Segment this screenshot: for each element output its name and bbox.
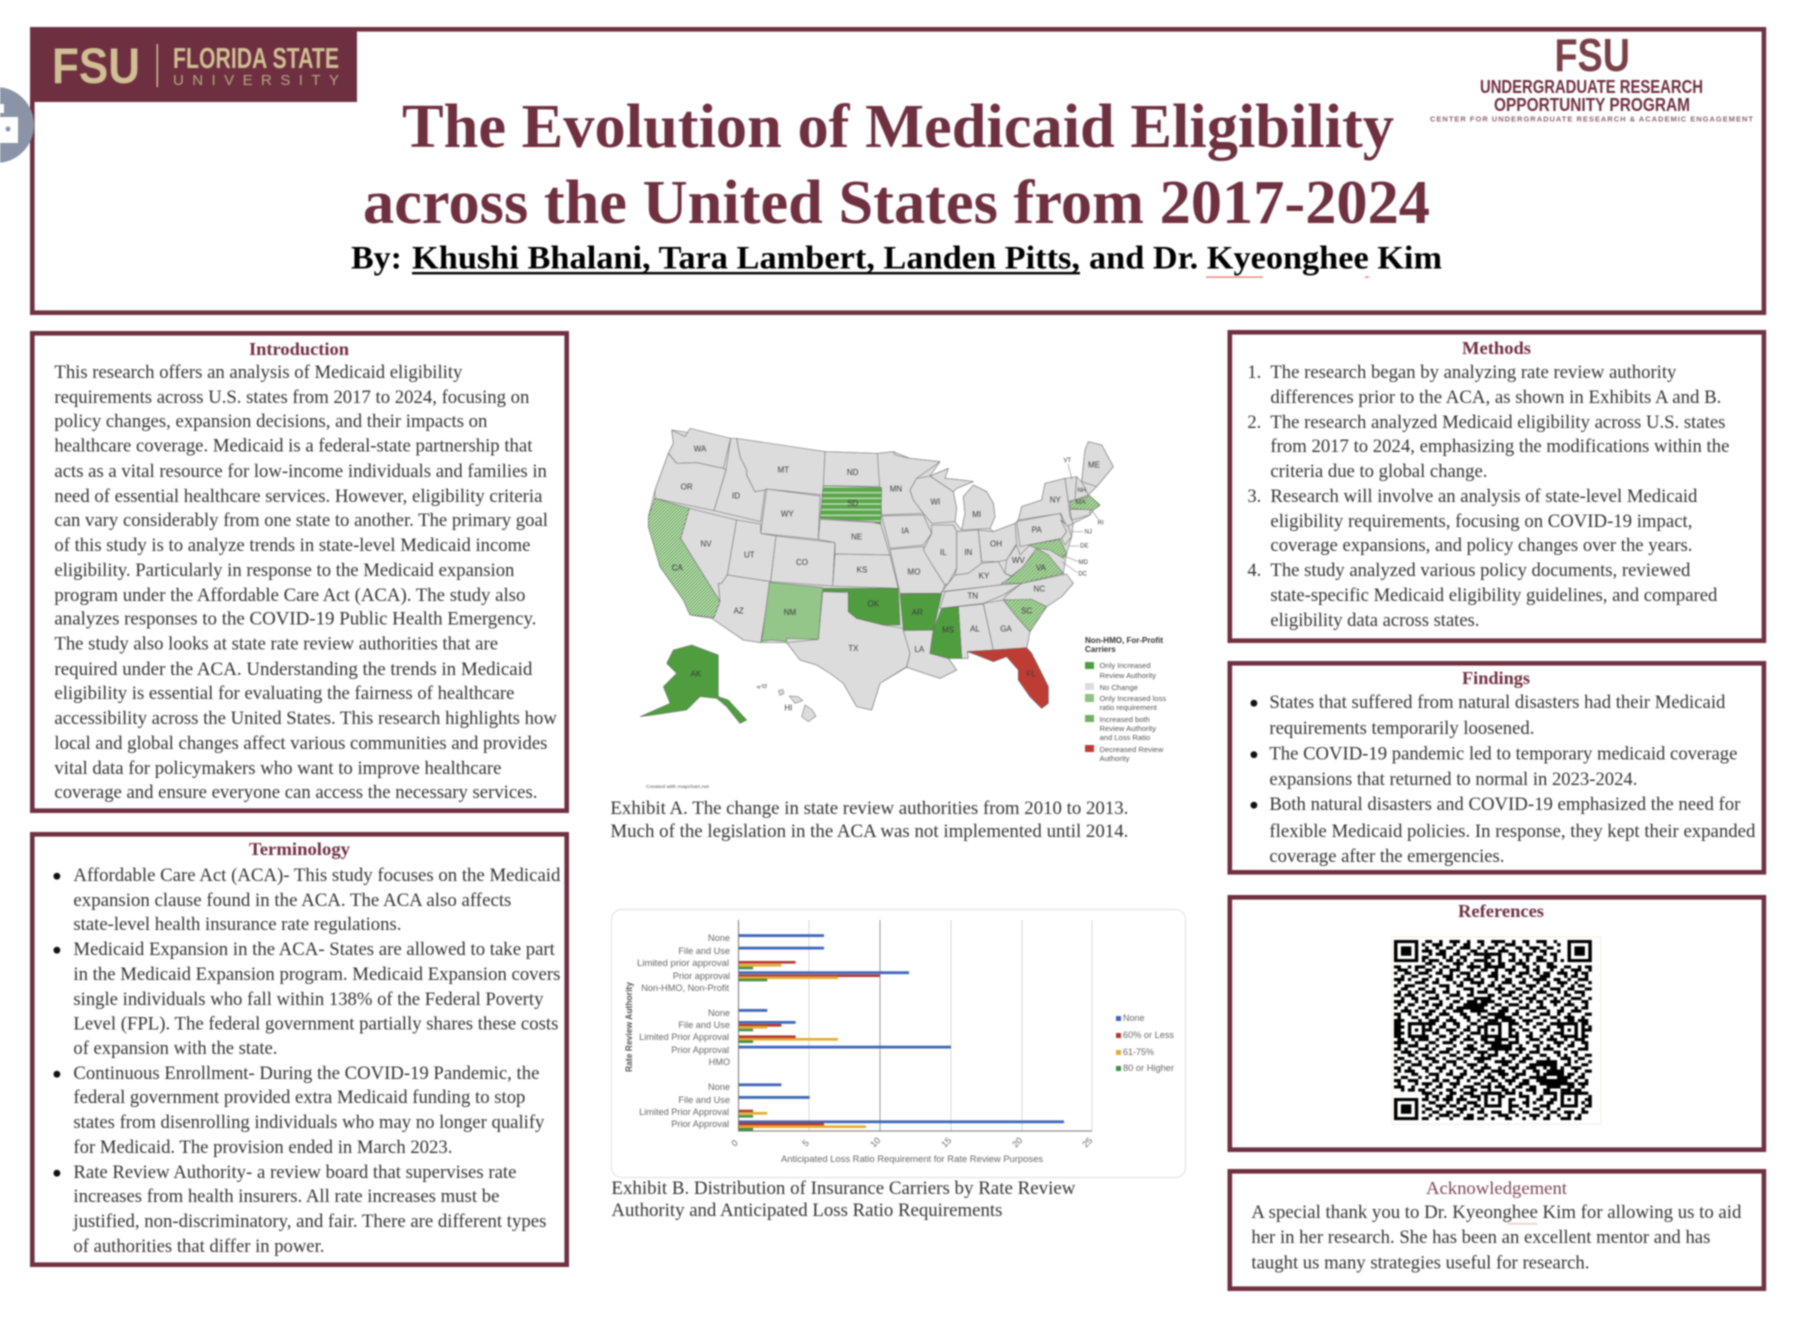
x axis tick labels and title: 10 [868, 1135, 882, 1149]
state abbreviation labels: DE [1080, 543, 1088, 549]
state abbreviation labels: PA [1032, 526, 1042, 535]
state abbreviation labels: ND [847, 468, 859, 477]
category labels: File and Use [678, 946, 730, 956]
introduction body text: local and global changes affect various communities and provides [54, 734, 547, 754]
US states map: Exhibit A [640, 428, 1113, 723]
methods numbered list: eligibility requirements, focusing on COVID-19 impact, [1270, 512, 1692, 532]
terminology bullet list: increases from health insurers. All rate increases must be [73, 1187, 499, 1207]
methods numbered list: criteria due to global change. [1270, 462, 1487, 482]
map legend: Review Authority [1100, 724, 1156, 733]
Exhibit A caption: Exhibit A. The change in state review authorities from 2010 to 2013. [610, 799, 1128, 819]
panel: introduction [32, 333, 567, 811]
increased review authority states [640, 588, 962, 723]
terminology bullet list: Continuous Enrollment- During the COVID-19 Pandemic, the [73, 1064, 539, 1084]
introduction body text: The study also looks at state rate review authorities that are [54, 634, 498, 654]
state abbreviation labels: SC [1021, 606, 1032, 615]
panel: findings [1230, 663, 1764, 872]
methods numbered list: The study analyzed various policy documents, reviewed [1270, 561, 1691, 581]
state abbreviation labels: AR [912, 608, 923, 617]
state abbreviation labels: NM [784, 608, 796, 617]
state abbreviation labels: LA [914, 645, 925, 654]
introduction body text [54, 363, 558, 803]
authors byline: and Dr. Kyeonghee Kim [1089, 240, 1442, 276]
decreased authority: Florida [967, 648, 1048, 708]
category labels: Prior Approval [671, 1045, 729, 1055]
terminology bullet list: of expansion with the state. [73, 1039, 277, 1059]
state abbreviation labels: WA [694, 445, 707, 454]
terminology bullet list: in the Medicaid Expansion program. Medicaid Expansion covers [73, 965, 560, 985]
chart bars [739, 934, 1064, 1131]
state abbreviation labels: KY [979, 571, 990, 580]
panel: header [30, 27, 1764, 313]
x axis tick labels and title: 0 [729, 1138, 740, 1148]
map legend: Increased both [1100, 715, 1150, 724]
introduction body text: eligibility. Particularly in response to the Medicaid expansion [54, 561, 514, 581]
undergraduate research logo: FSU [1554, 29, 1630, 81]
FSU Florida State University logo [30, 27, 357, 102]
introduction body text: policy changes, expansion decisions, and their impacts on [54, 412, 487, 432]
no change states [655, 428, 1113, 722]
introduction body text: vital data for policymakers who want to improve healthcare [54, 759, 501, 779]
x axis tick labels and title: 25 [1080, 1135, 1094, 1149]
terminology bullet list: Medicaid Expansion in the ACA- States are allowed to take part [73, 940, 556, 960]
state abbreviation labels: WI [930, 497, 940, 506]
state abbreviation labels: IA [902, 526, 910, 535]
introduction body text: program under the Affordable Care Act (ACA). The study also [54, 586, 525, 606]
map legend: Review Authority [1100, 671, 1156, 680]
authors byline [351, 240, 1442, 278]
map legend: Authority [1100, 754, 1130, 763]
introduction body text: healthcare coverage. Medicaid is a federal-state partnership that [54, 436, 533, 456]
undergraduate research logo: UNDERGRADUATE RESEARCH [1480, 77, 1703, 97]
FSU Florida State University logo: UNIVERSITY [173, 72, 339, 89]
category labels: Limited Prior Approval [639, 1032, 729, 1042]
terminology bullet list: Affordable Care Act (ACA)- This study focuses on the Medicaid [73, 866, 561, 886]
category labels: Limited prior approval [637, 958, 729, 968]
category labels: Limited Prior Approval [639, 1107, 729, 1117]
state abbreviation labels: MA [1076, 499, 1086, 506]
state abbreviation labels: VT [1064, 458, 1071, 464]
panel: acknowledgement [1230, 1171, 1764, 1289]
state abbreviation labels: OR [681, 482, 693, 491]
findings bullet list: Both natural disasters and COVID-19 emphasized the need for [1269, 795, 1740, 815]
state abbreviation labels: MO [908, 568, 920, 577]
QR finder and alignment squares [1394, 940, 1592, 1120]
category labels: Prior Approval [671, 1119, 729, 1129]
map legend: No Change [1100, 683, 1138, 692]
category labels: HMO [709, 1057, 730, 1067]
category labels [637, 933, 730, 1129]
map legend [646, 636, 1166, 789]
map legend: Non-HMO, For-Profit [1085, 636, 1163, 645]
hatched loss ratio states [648, 486, 1100, 642]
Exhibit B caption: Exhibit B. Distribution of Insurance Carriers by Rate Review [611, 1179, 1076, 1199]
category labels: None [708, 1008, 730, 1018]
terminology bullet list: justified, non-discriminatory, and fair. There are different types [72, 1212, 546, 1232]
category labels: Prior approval [673, 971, 730, 981]
category labels: None [708, 1082, 730, 1092]
terminology bullet list: of authorities that differ in power. [73, 1237, 324, 1257]
QR code [1392, 937, 1601, 1124]
state abbreviation labels: GA [1000, 625, 1012, 634]
methods numbered list: coverage expansions, and policy changes over the years. [1270, 536, 1692, 556]
state abbreviation labels: KS [857, 566, 867, 575]
state abbreviation labels: AL [970, 625, 980, 634]
heading: findings: Findings [1462, 668, 1530, 688]
undergraduate research logo: CENTER FOR UNDERGRADUATE RESEARCH & ACADEMIC ENGAGEMENT [1430, 114, 1753, 124]
methods numbered list: The research analyzed Medicaid eligibility across U.S. states [1270, 413, 1725, 433]
state abbreviation labels [672, 445, 1104, 712]
undergraduate research logo [1430, 29, 1753, 124]
category labels: Non-HMO, Non-Profit [641, 983, 729, 993]
methods numbered list: differences prior to the ACA, as shown in Exhibits A and B. [1270, 388, 1721, 408]
contiguous US silhouette [648, 430, 1113, 710]
heading: acknowledgement: Acknowledgement [1426, 1178, 1567, 1198]
state abbreviation labels: MS [942, 626, 954, 635]
introduction body text: need of essential healthcare services. However, eligibility criteria [54, 487, 542, 507]
Exhibit A caption [610, 799, 1128, 842]
state abbreviation labels: VA [1036, 563, 1047, 572]
floating grey circle widget [0, 87, 34, 163]
state abbreviation labels: TN [967, 591, 978, 600]
title: across the United States from 2017-2024 [363, 169, 1430, 237]
acknowledgement body text: A special thank you to Dr. Kyeonghee Kim for allowing us to aid [1251, 1203, 1742, 1223]
terminology bullet list: Level (FPL). The federal government partially shares these costs [73, 1015, 558, 1035]
state abbreviation labels: ME [1088, 461, 1100, 470]
introduction body text: coverage and ensure everyone can access the necessary services. [54, 783, 537, 803]
state abbreviation labels: RI [1098, 520, 1104, 526]
state abbreviation labels: WY [781, 510, 794, 519]
panel: methods [1230, 332, 1764, 641]
acknowledgement body text: her in her research. She has been an excellent mentor and has [1251, 1228, 1710, 1248]
chart legend: 61-75% [1123, 1047, 1154, 1057]
chart legend [1116, 1013, 1175, 1073]
panel: references [1230, 897, 1764, 1150]
introduction body text: acts as a vital resource for low-income individuals and families in [54, 462, 547, 482]
findings bullet list [1250, 693, 1756, 867]
terminology bullet list: Rate Review Authority- a review board that supervises rate [73, 1163, 516, 1183]
state abbreviation labels: AK [691, 670, 702, 679]
findings bullet list: flexible Medicaid policies. In response, they kept their expanded [1269, 822, 1756, 842]
map legend: Created with mapchart.net [646, 784, 710, 789]
state abbreviation labels: MD [1079, 560, 1089, 566]
panel: terminology [32, 834, 567, 1265]
heading: introduction: Introduction [249, 339, 349, 359]
title [363, 93, 1430, 237]
heading: methods: Methods [1462, 338, 1531, 358]
state abbreviation labels: UT [744, 551, 755, 560]
category labels: File and Use [678, 1020, 730, 1030]
category labels: File and Use [678, 1095, 730, 1105]
introduction body text: of this study is to analyze trends in state-level Medicaid income [54, 536, 530, 556]
heading: terminology: Terminology [249, 839, 350, 859]
terminology bullet list [54, 866, 561, 1257]
state abbreviation labels: IN [964, 548, 973, 557]
terminology bullet list: federal government provided extra Medicaid funding to stop [73, 1088, 525, 1108]
map legend: Only Increased [1100, 661, 1151, 670]
methods numbered list: state-specific Medicaid eligibility guidelines, and compared [1270, 586, 1718, 606]
findings bullet list: expansions that returned to normal in 2023-2024. [1269, 770, 1637, 790]
x axis tick labels and title: Anticipated Loss Ratio Requirement for Rate Review Purposes [781, 1154, 1044, 1164]
map legend: Only Increased loss [1100, 694, 1166, 703]
introduction body text: required under the ACA. Understanding the trends in Medicaid [54, 660, 533, 680]
state abbreviation labels: OH [990, 540, 1002, 549]
chart legend: None [1123, 1013, 1145, 1023]
state abbreviation labels: NV [700, 540, 712, 549]
FSU Florida State University logo: FLORIDA STATE [173, 43, 339, 75]
methods numbered list: 4. [1247, 561, 1261, 581]
state abbreviation labels: HI [784, 703, 792, 712]
undergraduate research logo: OPPORTUNITY PROGRAM [1494, 95, 1690, 115]
findings bullet list: The COVID-19 pandemic led to temporary medicaid coverage [1269, 744, 1737, 764]
state abbreviation labels: WV [1012, 556, 1025, 565]
introduction body text: eligibility is essential for evaluating the fairness of healthcare [54, 684, 514, 704]
FSU Florida State University logo: FSU [52, 38, 140, 94]
x axis tick labels and title: 5 [800, 1138, 811, 1148]
state abbreviation labels: DC [1078, 571, 1088, 577]
state abbreviation labels: OK [868, 600, 880, 609]
methods numbered list [1247, 363, 1729, 631]
findings bullet list: coverage after the emergencies. [1269, 847, 1504, 867]
terminology bullet list: state-level health insurance rate regulations. [73, 915, 401, 935]
Exhibit B caption: Authority and Anticipated Loss Ratio Requirements [611, 1201, 1002, 1221]
state abbreviation labels: FL [1026, 670, 1036, 679]
Exhibit B caption [611, 1179, 1076, 1221]
state abbreviation labels: NJ [1085, 530, 1092, 536]
acknowledgement body text: taught us many strategies useful for research. [1251, 1254, 1589, 1274]
authors byline: Khushi Bhalani, Tara Lambert, Landen Pitts, [412, 240, 1080, 276]
introduction body text: This research offers an analysis of Medicaid eligibility [54, 363, 463, 383]
title: The Evolution of Medicaid Eligibility [402, 93, 1394, 161]
state abbreviation labels: TX [848, 644, 859, 653]
chart legend: 60% or Less [1123, 1030, 1175, 1040]
x axis tick labels and title: 20 [1010, 1135, 1024, 1149]
methods numbered list: The research began by analyzing rate review authority [1270, 363, 1677, 383]
introduction body text: accessibility across the United States. This research highlights how [54, 709, 558, 729]
terminology bullet list: states from disenrolling individuals who may no longer qualify [73, 1113, 545, 1133]
state abbreviation labels: AZ [734, 606, 744, 615]
y axis title: Rate Review Authority [624, 982, 634, 1072]
methods numbered list: 3. [1247, 487, 1261, 507]
state abbreviation labels: ID [732, 492, 740, 501]
category labels: None [708, 933, 730, 943]
chart legend: 80 or Higher [1123, 1063, 1174, 1073]
state abbreviation labels: NH [1077, 488, 1086, 494]
heading: references: References [1458, 901, 1544, 921]
terminology bullet list: single individuals who fall within 138% of the Federal Poverty [73, 990, 544, 1010]
methods numbered list: Research will involve an analysis of state-level Medicaid [1270, 487, 1698, 507]
x axis tick labels and title: 15 [939, 1135, 953, 1149]
methods numbered list: 2. [1247, 413, 1261, 433]
state abbreviation labels: MT [778, 466, 789, 475]
findings bullet list: States that suffered from natural disasters had their Medicaid [1269, 693, 1726, 713]
state abbreviation labels: MI [972, 510, 981, 519]
map legend: and Loss Ratio [1100, 733, 1150, 742]
introduction body text: can vary considerably from one state to another. The primary goal [54, 511, 548, 531]
findings bullet list: requirements temporarily loosened. [1269, 719, 1534, 739]
terminology bullet list: expansion clause found in the ACA. The ACA also affects [73, 891, 511, 911]
x axis tick labels and title [729, 1135, 1094, 1164]
small state leader lines [1062, 464, 1098, 573]
state abbreviation labels: NC [1034, 584, 1045, 593]
Exhibit A caption: Much of the legislation in the ACA was not implemented until 2014. [610, 822, 1128, 842]
state abbreviation labels: SD [847, 499, 858, 508]
state abbreviation labels: MN [890, 485, 902, 494]
state abbreviation labels: CA [672, 563, 684, 572]
map legend: Carriers [1085, 645, 1116, 654]
state abbreviation labels: NE [851, 532, 862, 541]
Exhibit B bar chart [612, 910, 1186, 1178]
chart gridlines and axes [738, 920, 1092, 1131]
methods numbered list: from 2017 to 2024, emphasizing the modifications within the [1270, 437, 1729, 457]
state abbreviation labels: NY [1050, 496, 1062, 505]
map legend: ratio requirement [1100, 703, 1158, 712]
terminology bullet list: for Medicaid. The provision ended in March 2023. [73, 1138, 452, 1158]
state abbreviation labels: IL [940, 548, 947, 557]
map legend: Decreased Review [1100, 745, 1164, 754]
methods numbered list: eligibility data across states. [1270, 611, 1479, 631]
methods numbered list: 1. [1247, 363, 1261, 383]
acknowledgement body text [1251, 1203, 1742, 1274]
authors byline: By: [351, 240, 402, 276]
introduction body text: analyzes responses to the COVID-19 Public Health Emergency. [54, 609, 536, 629]
state abbreviation labels: CO [796, 558, 808, 567]
introduction body text: requirements across U.S. states from 2017 to 2024, focusing on [54, 388, 529, 408]
